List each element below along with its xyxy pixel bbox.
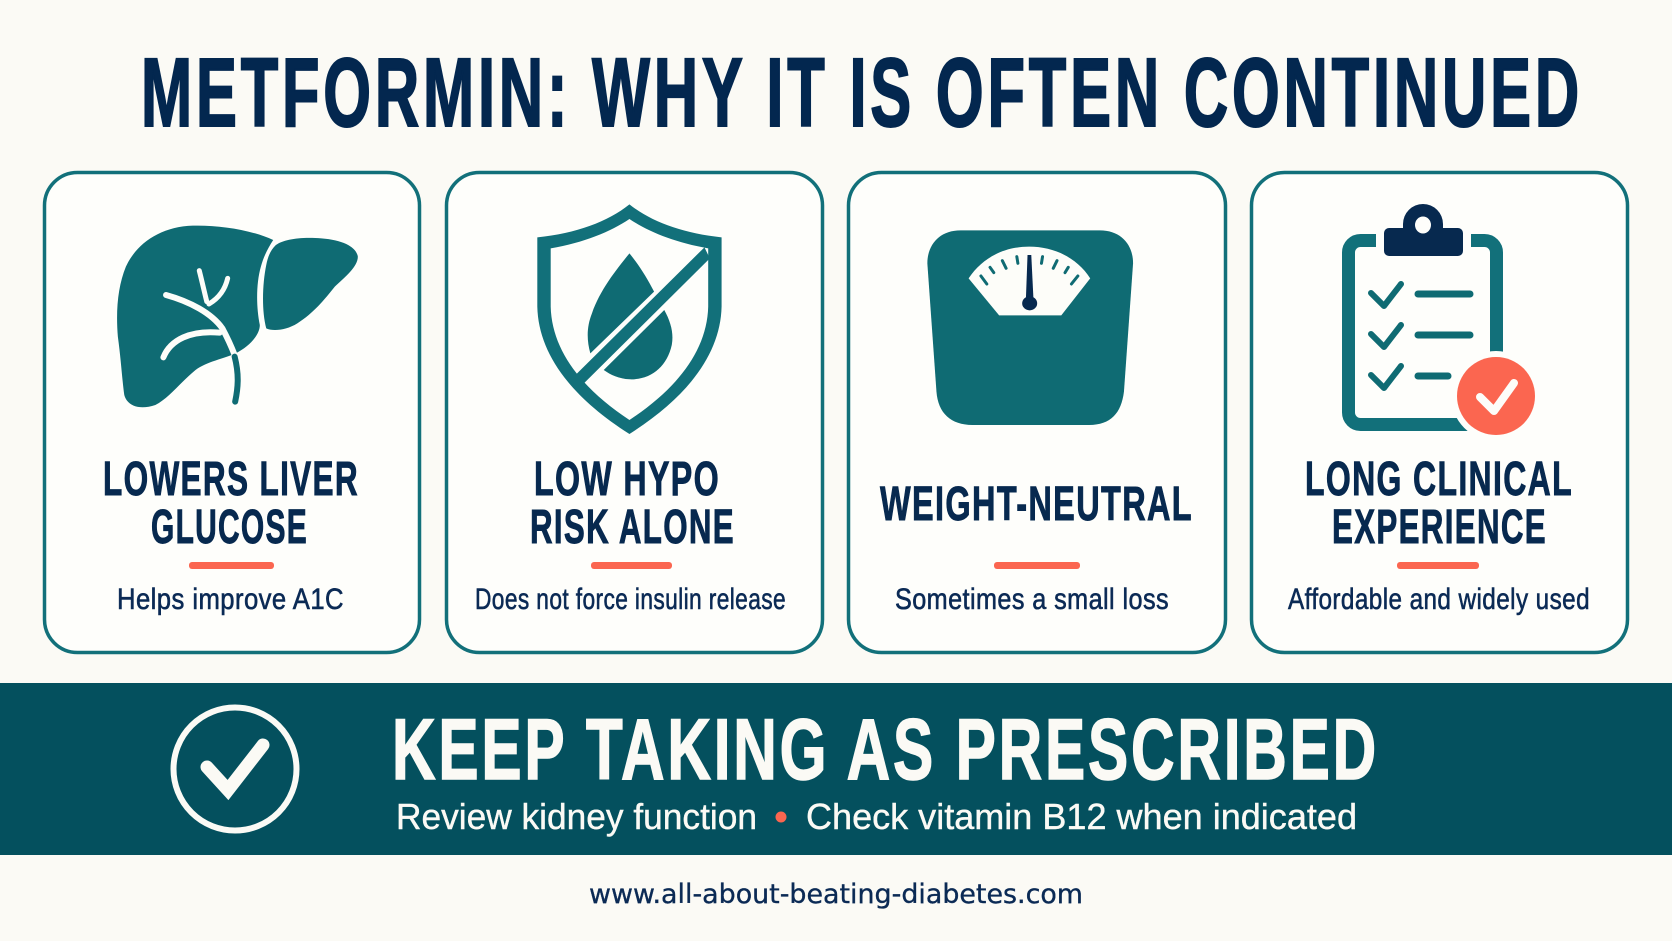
heading: lowers liver glucose: GLUCOSE [151, 501, 308, 554]
heading: low hypo risk alone [530, 453, 735, 554]
panel: weight-neutral [848, 172, 1226, 652]
icon: shield with crossed drop [537, 204, 722, 434]
accent bar [591, 562, 672, 569]
panel: long clinical experience [1252, 172, 1628, 652]
heading: lowers liver glucose: LOWERS LIVER [103, 453, 359, 506]
heading: weight-neutral: WEIGHT-NEUTRAL [880, 478, 1193, 531]
heading: lowers liver glucose [103, 453, 359, 554]
panel: low hypo risk alone [446, 172, 822, 652]
icon: bathroom scale [927, 230, 1133, 425]
caption: Affordable and widely used [1288, 583, 1590, 616]
caption: Does not force insulin release [475, 583, 786, 616]
accent bar [994, 562, 1080, 569]
icon: check in circle [174, 708, 296, 830]
banner subtext: Check vitamin B12 when indicated [806, 796, 1357, 837]
banner: keep taking as prescribed [0, 683, 1672, 855]
panel: lowers liver glucose [44, 172, 420, 652]
caption: Sometimes a small loss [895, 583, 1169, 616]
accent bar [189, 562, 274, 569]
banner subtext: Review kidney function [396, 796, 757, 837]
heading: low hypo risk alone: LOW HYPO [534, 453, 720, 506]
heading: low hypo risk alone: RISK ALONE [530, 501, 735, 554]
icon: clipboard with checklist [1348, 204, 1541, 441]
heading: long clinical experience: EXPERIENCE [1332, 501, 1547, 554]
icon: liver [117, 226, 358, 407]
caption: Helps improve A1C [117, 583, 344, 616]
heading: long clinical experience [1305, 453, 1573, 554]
accent bar [1397, 562, 1479, 569]
footer url: www.all-about-beating-diabetes.com [589, 879, 1083, 910]
banner subtext [396, 796, 1357, 837]
